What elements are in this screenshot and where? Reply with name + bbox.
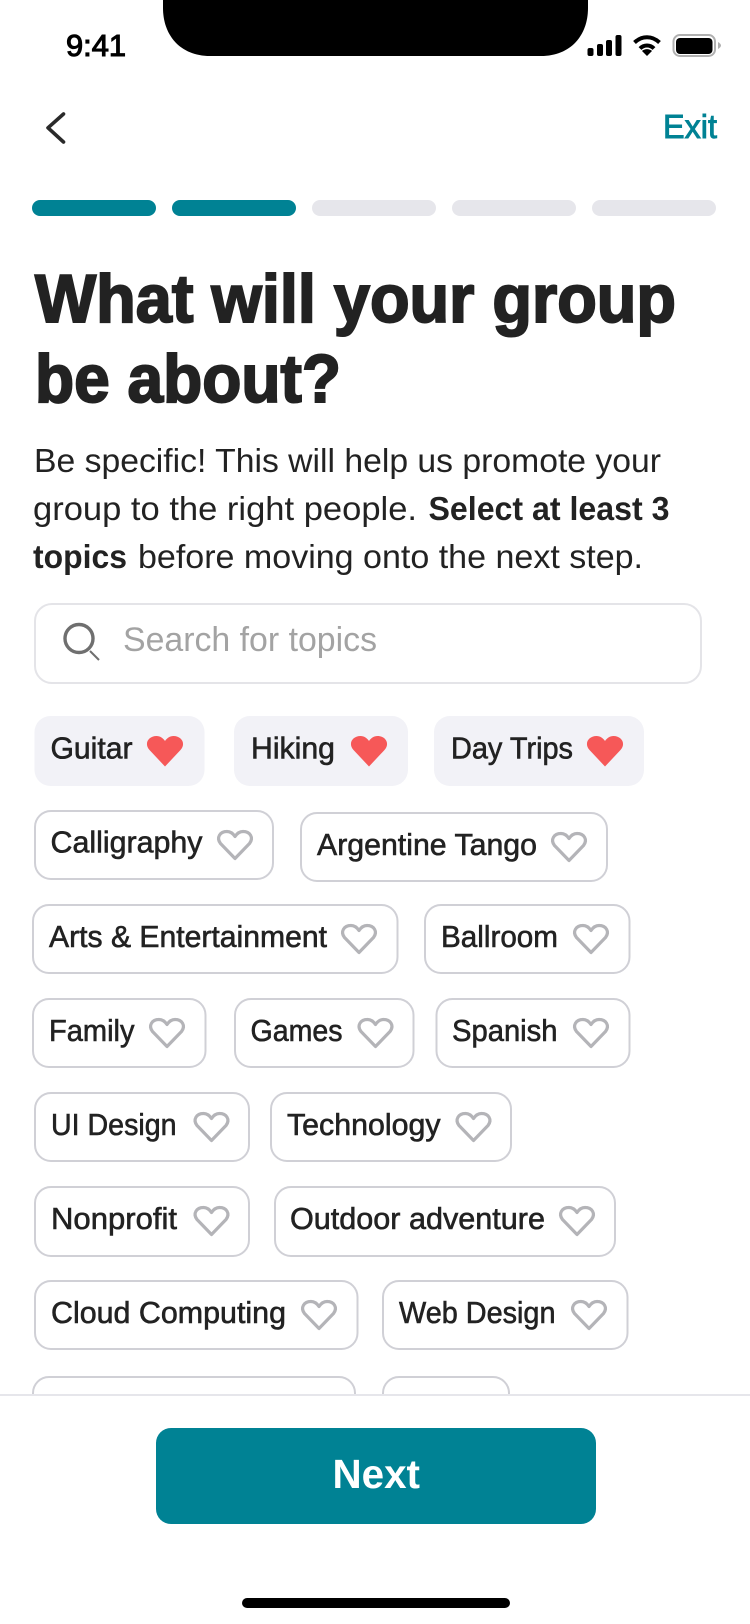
divider line — [0, 1394, 750, 1396]
exit link: Exit — [663, 108, 717, 145]
chip: Ballroom: Ballroom — [441, 919, 558, 954]
chip: Spanish — [436, 999, 630, 1067]
chip: Guitar — [34, 716, 204, 786]
icon: battery — [674, 35, 721, 56]
description — [33, 442, 670, 575]
chip: Calligraphy: Calligraphy — [50, 824, 203, 860]
chip: Arts & Entertainment — [33, 905, 398, 973]
icon: back chevron — [48, 114, 64, 142]
description: Be specific! This will help us promote your — [34, 442, 661, 479]
title — [35, 261, 676, 417]
chip: Games: Games — [250, 1013, 342, 1048]
icon: signal — [588, 35, 622, 56]
next button: Next — [332, 1451, 420, 1497]
chip: Calligraphy — [35, 811, 273, 879]
chip: Technology: Technology — [287, 1107, 441, 1142]
chip: Day Trips — [434, 716, 644, 786]
chip: Guitar: Guitar — [50, 730, 132, 766]
icon: search — [65, 624, 99, 660]
status bar — [66, 0, 721, 63]
description: group to the right people. — [33, 490, 417, 527]
chip: UI Design — [35, 1093, 249, 1161]
chip: Hiking — [234, 716, 408, 786]
chip: Family: Family — [49, 1013, 135, 1048]
description: Select at least 3 — [428, 490, 670, 527]
chip: UI Design: UI Design — [51, 1107, 176, 1142]
search field — [35, 604, 701, 683]
chip: Outdoor adventure: Outdoor adventure — [290, 1201, 545, 1236]
search placeholder: Search for topics — [123, 621, 377, 659]
chip: Family — [33, 999, 206, 1067]
chip: Argentine Tango — [301, 813, 607, 881]
chip: Hiking: Hiking — [251, 730, 335, 766]
notch — [163, 0, 588, 56]
description: before moving onto the next step. — [138, 538, 643, 575]
chip: Day Trips: Day Trips — [451, 730, 573, 766]
chip: Cloud Computing — [35, 1281, 358, 1349]
progress bar — [32, 200, 716, 216]
chip: Argentine Tango: Argentine Tango — [317, 827, 537, 862]
description: topics — [33, 538, 127, 575]
chip: Technology — [271, 1093, 511, 1161]
chip: Arts & Entertainment: Arts & Entertainment — [49, 919, 327, 954]
chip: Games — [235, 999, 414, 1067]
chip: Web Design: Web Design — [399, 1295, 556, 1330]
clipped chips row — [32, 1376, 510, 1394]
chip: Cloud Computing: Cloud Computing — [51, 1295, 286, 1330]
chip: Outdoor adventure — [275, 1187, 615, 1256]
chip: Nonprofit: Nonprofit — [51, 1201, 177, 1236]
icon: wifi — [634, 37, 660, 56]
chip: Web Design — [383, 1281, 628, 1349]
chip: Nonprofit — [35, 1187, 249, 1256]
clock: 9:41 — [66, 28, 126, 63]
next button — [156, 1428, 596, 1524]
home indicator — [242, 1598, 510, 1608]
chip: Ballroom — [425, 905, 630, 973]
chip: Spanish: Spanish — [452, 1013, 558, 1048]
title: be about? — [35, 341, 341, 417]
title: What will your group — [35, 261, 676, 337]
